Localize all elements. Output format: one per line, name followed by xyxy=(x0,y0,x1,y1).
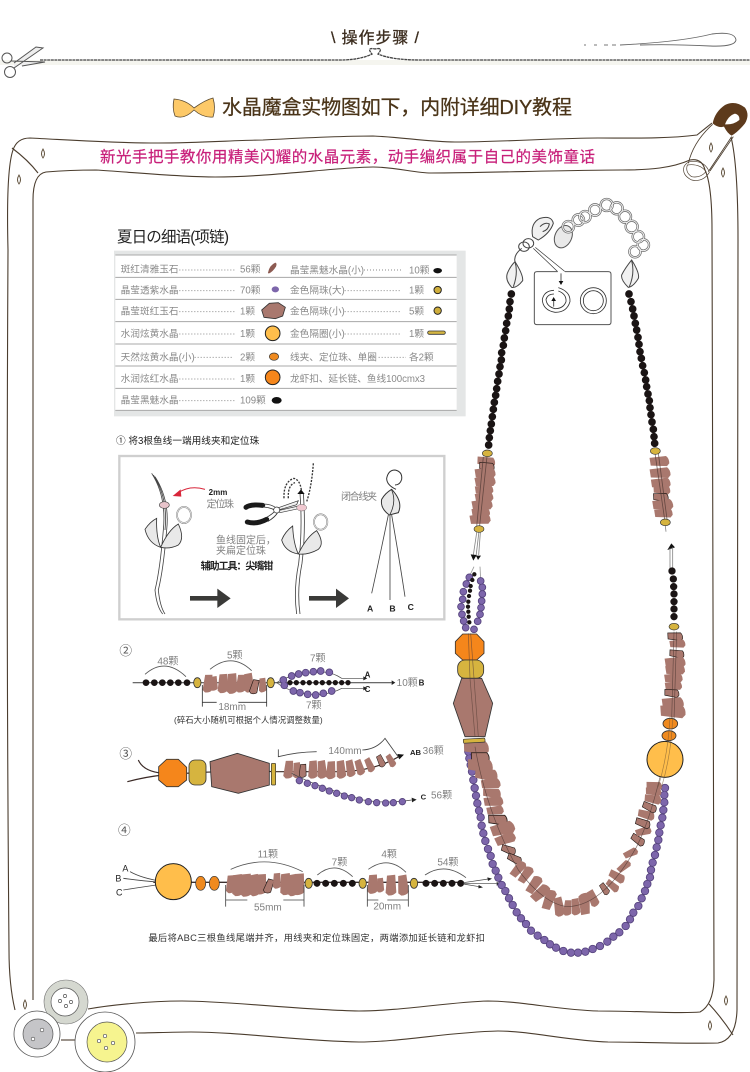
black beads xyxy=(317,873,461,894)
necklace upper part xyxy=(469,199,675,568)
table left column text: 水润炫红水晶 xyxy=(121,373,179,385)
table left column text: 1颗 xyxy=(240,306,255,317)
orange bead xyxy=(159,759,187,787)
instruction text xyxy=(201,533,276,572)
ABC labels: A xyxy=(122,864,128,874)
upper purple and black beads xyxy=(461,567,482,629)
heading bow icon xyxy=(173,98,214,117)
18mm bracket xyxy=(202,685,267,713)
icon: buttons xyxy=(14,980,135,1072)
black beads xyxy=(146,673,187,693)
counts and arcs: 5颗 xyxy=(227,650,243,662)
table right column text: 1颗 xyxy=(409,329,424,340)
top header band xyxy=(0,33,750,65)
counts and arcs: B xyxy=(419,679,425,688)
counts and arcs: 4颗 xyxy=(381,848,397,860)
strand lines xyxy=(127,756,400,782)
table left column text: 晶莹斑红玉石 xyxy=(121,305,179,317)
counts and arcs: 7颗 xyxy=(306,700,322,712)
counts and arcs xyxy=(231,848,466,878)
lower chip arc xyxy=(463,740,667,917)
counts and arcs: C xyxy=(365,685,371,694)
table left column text xyxy=(121,264,266,407)
decorative drops xyxy=(18,143,728,1030)
table left column text: 70颗 xyxy=(240,285,261,296)
step 3 number: ③ xyxy=(119,747,132,761)
table left column text: 1颗 xyxy=(240,329,255,340)
2mm label: 2mm xyxy=(209,488,227,497)
table left column text: 2颗 xyxy=(240,352,255,363)
step 3 xyxy=(119,738,452,803)
gold spacer xyxy=(267,678,274,688)
table right column text: 各2颗 xyxy=(409,351,434,363)
brackets xyxy=(226,885,408,913)
clip with crimp bead xyxy=(145,473,191,614)
counts and arcs: 7颗 xyxy=(332,856,347,868)
table right column text: 金色隔珠(小) xyxy=(290,305,345,317)
table left column text: 水润炫黄水晶 xyxy=(121,328,179,340)
step 2 xyxy=(119,644,425,725)
table right column text: 金色隔圈(小) xyxy=(290,328,345,340)
caption: (碎石大小随机可根据个人情况调整数量) xyxy=(174,715,323,725)
chips 4 xyxy=(367,874,409,896)
counts and arcs: 48颗 xyxy=(157,655,178,667)
table left column text: 56颗 xyxy=(240,265,261,276)
step 1 xyxy=(116,435,444,619)
step 4 xyxy=(115,823,501,943)
gold bead xyxy=(189,760,206,785)
purple strand xyxy=(292,773,417,803)
arrow xyxy=(190,589,231,608)
ABC labels: B xyxy=(389,604,396,614)
labels: 36颗 xyxy=(423,745,444,757)
lobster clasp and left clip xyxy=(507,217,553,287)
arrow xyxy=(309,589,349,608)
counts and arcs: A xyxy=(365,670,371,679)
left orange, gold and hexagon stones xyxy=(453,633,493,743)
step 1 heading: ① 将3根鱼线一端用线夹和定位珠 xyxy=(116,435,260,447)
gold spacers xyxy=(305,878,418,888)
instruction text: 鱼线固定后， xyxy=(216,533,276,546)
subheading: 新光手把手教你用精美闪耀的水晶元素，动手编织属于自己的美饰童话 xyxy=(100,147,595,166)
chips xyxy=(283,753,397,779)
labels xyxy=(410,745,452,801)
step 1 panel xyxy=(119,456,444,619)
red arrow xyxy=(173,488,205,497)
counts and arcs: 54颗 xyxy=(437,856,458,868)
labels: AB xyxy=(410,748,422,757)
table right column text: 10颗 xyxy=(409,265,430,276)
table bead icons xyxy=(262,263,445,404)
chips xyxy=(202,673,267,695)
header title: \ 操作步骤 / xyxy=(331,29,420,47)
table right column text: 金色隔珠(大) xyxy=(290,284,345,296)
counts and arcs: 11颗 xyxy=(258,848,278,860)
table right column text: 龙虾扣、延长链、鱼线100cmx3 xyxy=(290,373,425,385)
step 4 number: ④ xyxy=(118,823,131,837)
icon: scissors xyxy=(2,47,45,78)
instruction text: 夹扁定位珠 xyxy=(216,544,266,557)
large yellow crystal xyxy=(647,717,683,787)
strand xyxy=(153,880,464,884)
table right column text: 晶莹黑魅水晶(小) xyxy=(290,264,364,276)
140mm bracket: 140mm xyxy=(328,746,362,757)
closed clip xyxy=(372,470,405,600)
ABC labels: C xyxy=(408,602,415,612)
right orange beads xyxy=(662,718,678,741)
strand xyxy=(133,681,392,684)
inset: jump rings xyxy=(533,247,611,325)
chips 11 xyxy=(226,873,305,897)
black bead strands xyxy=(489,294,655,445)
materials title: 夏日の细语(项链) xyxy=(117,228,229,246)
purple and black strands xyxy=(277,671,367,695)
brackets: 55mm xyxy=(254,902,282,913)
ABC labels: B xyxy=(115,874,121,884)
140mm bracket xyxy=(278,738,399,758)
table right column text: 1颗 xyxy=(409,285,424,296)
large purple bead strand xyxy=(468,752,665,953)
gold bar xyxy=(271,763,276,785)
table left column text: 109颗 xyxy=(240,396,266,407)
right gold spacer xyxy=(669,623,679,630)
instruction text: 辅助工具：尖嘴钳 xyxy=(201,559,273,572)
counts and arcs: 10颗 xyxy=(397,677,418,689)
heading: 水晶魔盒实物图如下，内附详细DIY教程 xyxy=(222,96,572,119)
ABC labels: C xyxy=(116,887,123,897)
brackets: 20mm xyxy=(373,902,401,913)
table right column text: 线夹、定位珠、单圈 xyxy=(290,351,377,363)
table left column text: 1颗 xyxy=(240,374,255,385)
table left column text: 斑红清雅玉石 xyxy=(121,264,179,276)
end arrows xyxy=(463,877,501,888)
extension chain xyxy=(551,199,649,257)
final caption: 最后将ABC三根鱼线尾端并齐，用线夹和定位珠固定，两端添加延长链和龙虾扣 xyxy=(148,932,485,943)
right upper chips xyxy=(660,632,686,720)
counts and arcs xyxy=(145,650,425,712)
table right column text: 5颗 xyxy=(409,306,424,317)
ABC labels: A xyxy=(367,604,374,614)
hexagon stone xyxy=(210,753,269,793)
table left column text: 晶莹透紫水晶 xyxy=(121,284,179,296)
pliers and second clip xyxy=(246,463,327,614)
ABC labels xyxy=(115,864,128,897)
yellow crystal xyxy=(155,864,191,900)
labels: 56颗 xyxy=(431,789,452,801)
right black beads xyxy=(672,571,674,617)
labels: C xyxy=(421,792,427,801)
left chip section xyxy=(469,450,496,561)
necklace lower part xyxy=(453,567,686,953)
table right column text xyxy=(290,264,434,385)
crimp bead label: 定位珠 xyxy=(207,498,234,511)
ABC labels xyxy=(367,602,415,614)
arrow AB xyxy=(397,754,404,759)
small orange beads xyxy=(196,876,219,890)
closing clip label: 闭合线夹 xyxy=(341,490,377,503)
gold spacer xyxy=(194,678,201,688)
step 2 number: ② xyxy=(119,644,132,658)
table left column text: 天然炫黄水晶(小) xyxy=(121,351,195,363)
icon: safety pin xyxy=(684,103,747,180)
right chip section xyxy=(649,448,675,568)
panel: materials table xyxy=(114,251,466,416)
right clip xyxy=(622,260,639,287)
ABC lines xyxy=(123,872,163,890)
counts and arcs: 7颗 xyxy=(310,653,326,665)
table left column text: 晶莹黑魅水晶 xyxy=(121,395,179,407)
18mm bracket: 18mm xyxy=(218,702,246,713)
